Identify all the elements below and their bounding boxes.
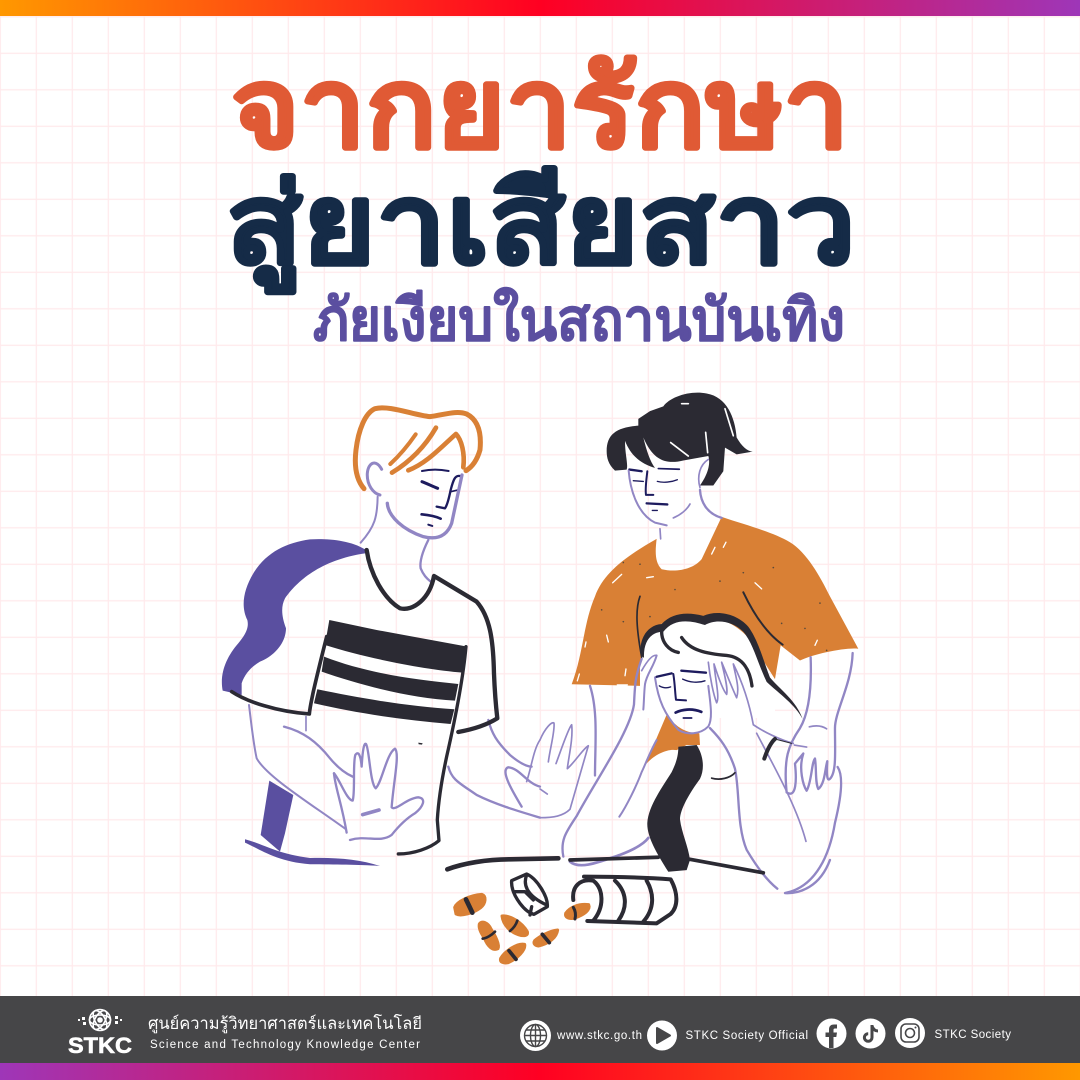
man's face lines [422,470,460,526]
logo wordmark: STKC [68,1033,132,1058]
long hair strand [647,745,703,872]
woman's hair [607,393,753,485]
youtube channel text: STKC Society Official [686,1030,808,1042]
illustration: woman in orange shirt and seated figure [540,393,858,893]
website text: www.stkc.go.th [556,1030,642,1042]
seated hair, arm band and table lines [540,592,792,873]
grey shirt speckles [601,562,827,651]
icon: globe [520,1020,551,1051]
seated head white area [640,616,775,718]
icon: youtube play [647,1020,677,1050]
logo atom mark [90,1008,110,1032]
hair highlights [671,404,733,456]
striped shirt outline [232,550,497,854]
title line 2: สู่ยาเสียสาว [226,162,856,294]
footer bar [0,996,1080,1063]
subtitle: ภัยเงียบในสถานบันเทิง [313,286,845,353]
table line left [447,858,558,869]
logo dots [78,1016,122,1025]
seated figure's face [657,671,706,718]
icon: facebook [816,1018,846,1048]
STKC logo [68,1008,132,1058]
title line 1: จากยารักษา [231,46,849,171]
white shirt flecks [577,542,817,685]
bottom gradient bar [0,1063,1080,1080]
instagram handle text: STKC Society [934,1029,1011,1041]
man's purple lower back [261,781,293,852]
man's purple shoulder [222,539,365,695]
man's lavender skin outlines [249,463,540,840]
icon: tiktok [856,1018,886,1048]
woman's face lines [629,469,679,510]
pill bottle [573,877,676,923]
seated figure's hair band [640,613,803,719]
orange shirt [572,517,858,686]
shirt stripes [314,620,467,745]
illustration: man in striped shirt [222,408,540,866]
icon: instagram [895,1018,925,1048]
illustration: spilled pills and bottle [447,858,676,963]
footer Thai organisation name: ศูนย์ความรู้วิทยาศาสตร์และเทคโนโลยี [148,1014,422,1034]
neck orange [645,715,700,765]
footer English organisation name: Science and Technology Knowledge Center [150,1039,420,1051]
bottle cap [512,874,547,915]
man's purple base stroke [245,839,380,866]
woman's lavender outlines [540,459,853,893]
title block [226,46,856,353]
top gradient bar [0,0,1080,16]
pills [455,894,589,963]
man's hair [355,408,480,489]
pill bands [466,899,576,959]
